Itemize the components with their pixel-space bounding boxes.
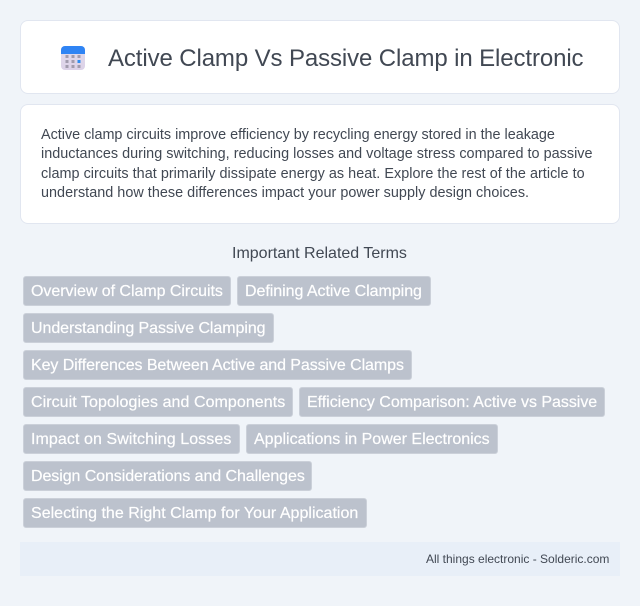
- tag: [23, 498, 367, 528]
- tag: Applications in Power Electronics: [254, 431, 490, 448]
- tag: [23, 350, 412, 380]
- tag: [299, 387, 605, 417]
- footer bar: [20, 542, 620, 576]
- tag: [246, 424, 498, 454]
- tag: [23, 461, 312, 491]
- tag: Key Differences Between Active and Passive Clamps: [31, 357, 404, 374]
- tag: Design Considerations and Challenges: [31, 468, 305, 485]
- intro text: understand how these differences impact your power supply design choices.: [41, 185, 529, 201]
- footer text: All things electronic - Solderic.com: [426, 552, 609, 566]
- intro text: [41, 127, 593, 201]
- tag: Overview of Clamp Circuits: [31, 283, 223, 300]
- tag: Circuit Topologies and Components: [31, 394, 285, 411]
- intro text: clamp circuits that primarily dissipate energy as heat. Explore the rest of the article to: [41, 166, 585, 182]
- section heading: Important Related Terms: [232, 245, 407, 262]
- tag: [23, 387, 293, 417]
- intro text: Active clamp circuits improve efficiency by recycling energy stored in the leakage: [41, 127, 555, 143]
- icon: calendar: [61, 46, 85, 70]
- title: Active Clamp Vs Passive Clamp in Electronic: [108, 45, 583, 72]
- tag: [23, 313, 274, 343]
- intro card: [20, 104, 620, 224]
- intro text: inductances during switching, reducing losses and voltage stress compared to passive: [41, 146, 593, 162]
- tag: Defining Active Clamping: [245, 283, 422, 300]
- tag list: [23, 276, 605, 528]
- tag: Selecting the Right Clamp for Your Application: [31, 505, 358, 522]
- header card: [20, 20, 620, 94]
- tag: [23, 424, 240, 454]
- tag: Impact on Switching Losses: [31, 431, 231, 448]
- tag: Efficiency Comparison: Active vs Passive: [307, 394, 597, 411]
- tag: Understanding Passive Clamping: [31, 320, 265, 337]
- tag: [23, 276, 231, 306]
- tag: [237, 276, 431, 306]
